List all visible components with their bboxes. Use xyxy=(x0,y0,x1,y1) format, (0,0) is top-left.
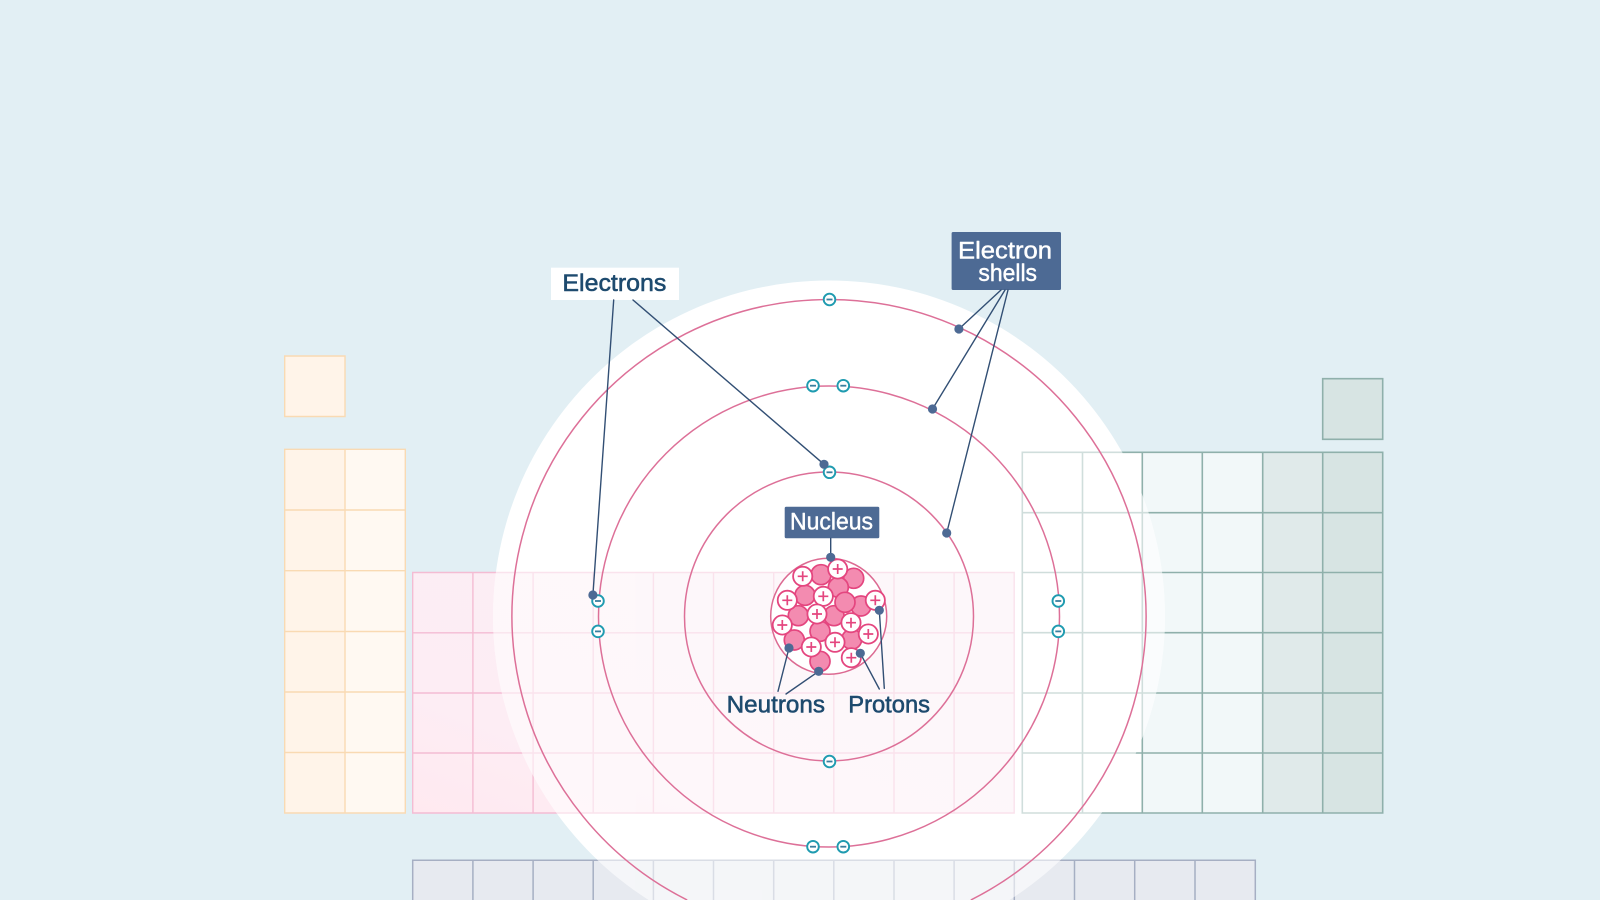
electrons label: Electrons xyxy=(562,270,666,297)
protons xyxy=(773,559,885,667)
periodic table backdrop xyxy=(285,356,1383,900)
protons leader lines xyxy=(856,606,884,689)
electron shells label xyxy=(952,232,1061,290)
neutrons label: Neutrons xyxy=(727,692,825,719)
neutrons leader lines xyxy=(778,643,823,694)
electron shells leader lines xyxy=(928,290,1008,538)
white atom disc xyxy=(493,280,1165,900)
electron shells xyxy=(512,299,1146,900)
neutrons xyxy=(784,565,871,671)
periodic table seen through disc xyxy=(494,452,1164,900)
protons label: Protons xyxy=(848,692,930,719)
electrons xyxy=(592,294,1064,852)
nucleus label: Nucleus xyxy=(790,508,873,535)
electron shells label: Electron xyxy=(958,237,1052,264)
electrons label xyxy=(551,268,679,300)
nucleus xyxy=(771,558,887,674)
nucleus leader xyxy=(826,538,835,562)
electron shells label: shells xyxy=(978,260,1037,287)
electrons leader lines xyxy=(588,300,829,600)
